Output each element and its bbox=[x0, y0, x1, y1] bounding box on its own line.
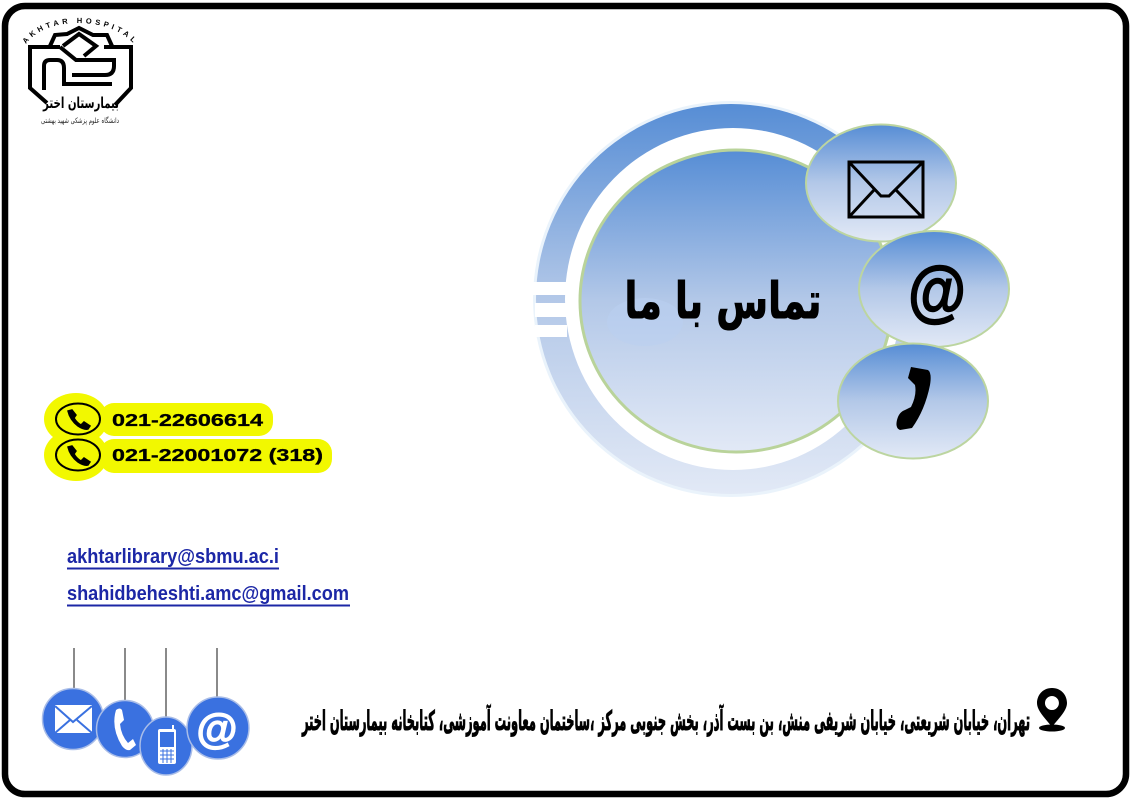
main title: تماس با ما bbox=[624, 272, 822, 330]
email addresses bbox=[67, 546, 350, 606]
phone number 2: 021-22001072 (318) bbox=[112, 445, 323, 465]
phone number 1: 021-22606614 bbox=[112, 410, 263, 430]
tag: mail bbox=[42, 688, 104, 750]
logo university line: دانشگاه علوم پزشکی شهید بهشتی bbox=[41, 116, 119, 125]
tag: phone bbox=[96, 700, 154, 758]
outer ring bbox=[533, 101, 929, 497]
contact diagram bbox=[531, 101, 1009, 497]
logo emblem bbox=[30, 28, 131, 105]
badge: envelope bbox=[806, 124, 956, 242]
main circle bbox=[580, 150, 892, 452]
badge: at sign bbox=[859, 231, 1009, 347]
tag: mobile bbox=[140, 717, 192, 775]
icon: at: @ bbox=[908, 253, 966, 329]
phone numbers bbox=[44, 393, 332, 481]
icon: handset bbox=[896, 367, 931, 430]
ring notch stripes bbox=[531, 282, 567, 337]
phone icon 1 bbox=[56, 404, 100, 434]
icon: envelope bbox=[849, 162, 923, 217]
faint watermark bbox=[607, 298, 683, 346]
tag: at bbox=[187, 697, 249, 759]
logo: Akhtar Hospital bbox=[23, 18, 134, 126]
icon: location pin bbox=[1037, 688, 1067, 732]
yellow highlight bbox=[44, 393, 332, 481]
hanging contact icons bbox=[42, 648, 249, 775]
phone icon 2 bbox=[56, 440, 100, 470]
badge: telephone bbox=[838, 344, 988, 458]
strings bbox=[74, 648, 217, 720]
email 2: shahidbeheshti.amc@gmail.com bbox=[67, 583, 349, 605]
tag: at: @ bbox=[197, 705, 237, 752]
email 1: akhtarlibrary@sbmu.ac.i bbox=[67, 546, 279, 568]
address bbox=[301, 688, 1067, 737]
logo arc text: AKHTAR HOSPITAL bbox=[23, 18, 134, 44]
logo Persian name: بیمارستان اختر bbox=[42, 94, 119, 112]
